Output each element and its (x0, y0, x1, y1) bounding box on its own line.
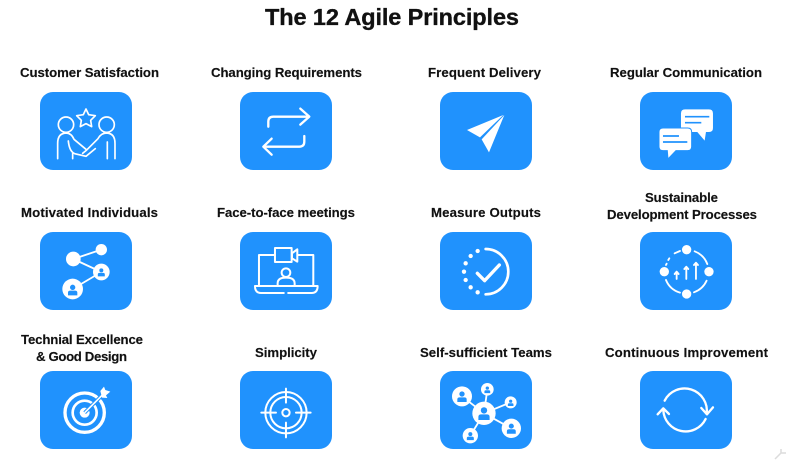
tile: Measure Outputs (440, 232, 532, 310)
label: Measure Outputs: Measure Outputs (431, 205, 541, 220)
tile: Sustainable Development Processes (640, 232, 732, 310)
tile: Technical Excellence (40, 371, 132, 449)
icon: share network of people (62, 244, 110, 299)
tile: Frequent Delivery (440, 92, 532, 170)
label: Customer Satisfaction: Customer Satisfaction (20, 65, 159, 80)
label: Face-to-face meetings: Face-to-face meetings (217, 205, 355, 220)
tile: Changing Requirements (240, 92, 332, 170)
icon: team network (452, 383, 521, 443)
icon: growth cycle (660, 245, 714, 299)
label: Changing Requirements: Changing Requirements (211, 65, 362, 80)
label: Motivated Individuals: Motivated Individuals (21, 205, 158, 220)
label: Regular Communication: Regular Communication (610, 65, 762, 80)
label: Frequent Delivery: Frequent Delivery (428, 65, 542, 80)
icon: crosshair (261, 389, 311, 437)
icon: paper plane (467, 115, 504, 152)
tile: Continuous Improvement (640, 371, 732, 449)
corner mark (775, 449, 786, 459)
icon: progress check (462, 249, 508, 294)
label: Sustainable Development Processes: Development Processes (607, 207, 757, 222)
icon: video call on laptop (255, 248, 318, 293)
title: The 12 Agile Principles (265, 4, 519, 30)
tile: Simplicity (240, 371, 332, 449)
tile: Face-to-face meetings (240, 232, 332, 310)
icon: refresh cycle (658, 388, 713, 431)
label: Technical Excellence and Good Design (21, 332, 143, 364)
tile: Self-sufficient Teams (440, 371, 532, 449)
label: Simplicity: Simplicity (255, 345, 318, 360)
tile: Customer Satisfaction (40, 92, 132, 170)
label: Continuous Improvement: Continuous Improvement (605, 345, 769, 360)
label: Technical Excellence and Good Design: & Good Design (36, 349, 127, 364)
tile: Motivated Individuals (40, 232, 132, 310)
tile: Regular Communication (640, 92, 732, 170)
icon: handshake and star (58, 109, 115, 159)
icon: target with arrow (65, 387, 110, 432)
icon: chat bubbles (659, 109, 713, 159)
label: Technical Excellence and Good Design: Technial Excellence (21, 332, 143, 347)
label: Sustainable Development Processes: Sustainable (645, 190, 718, 205)
icon: swap arrows (263, 109, 309, 155)
label: Self-sufficient Teams: Self-sufficient Teams (420, 345, 552, 360)
label: Sustainable Development Processes (607, 190, 757, 222)
